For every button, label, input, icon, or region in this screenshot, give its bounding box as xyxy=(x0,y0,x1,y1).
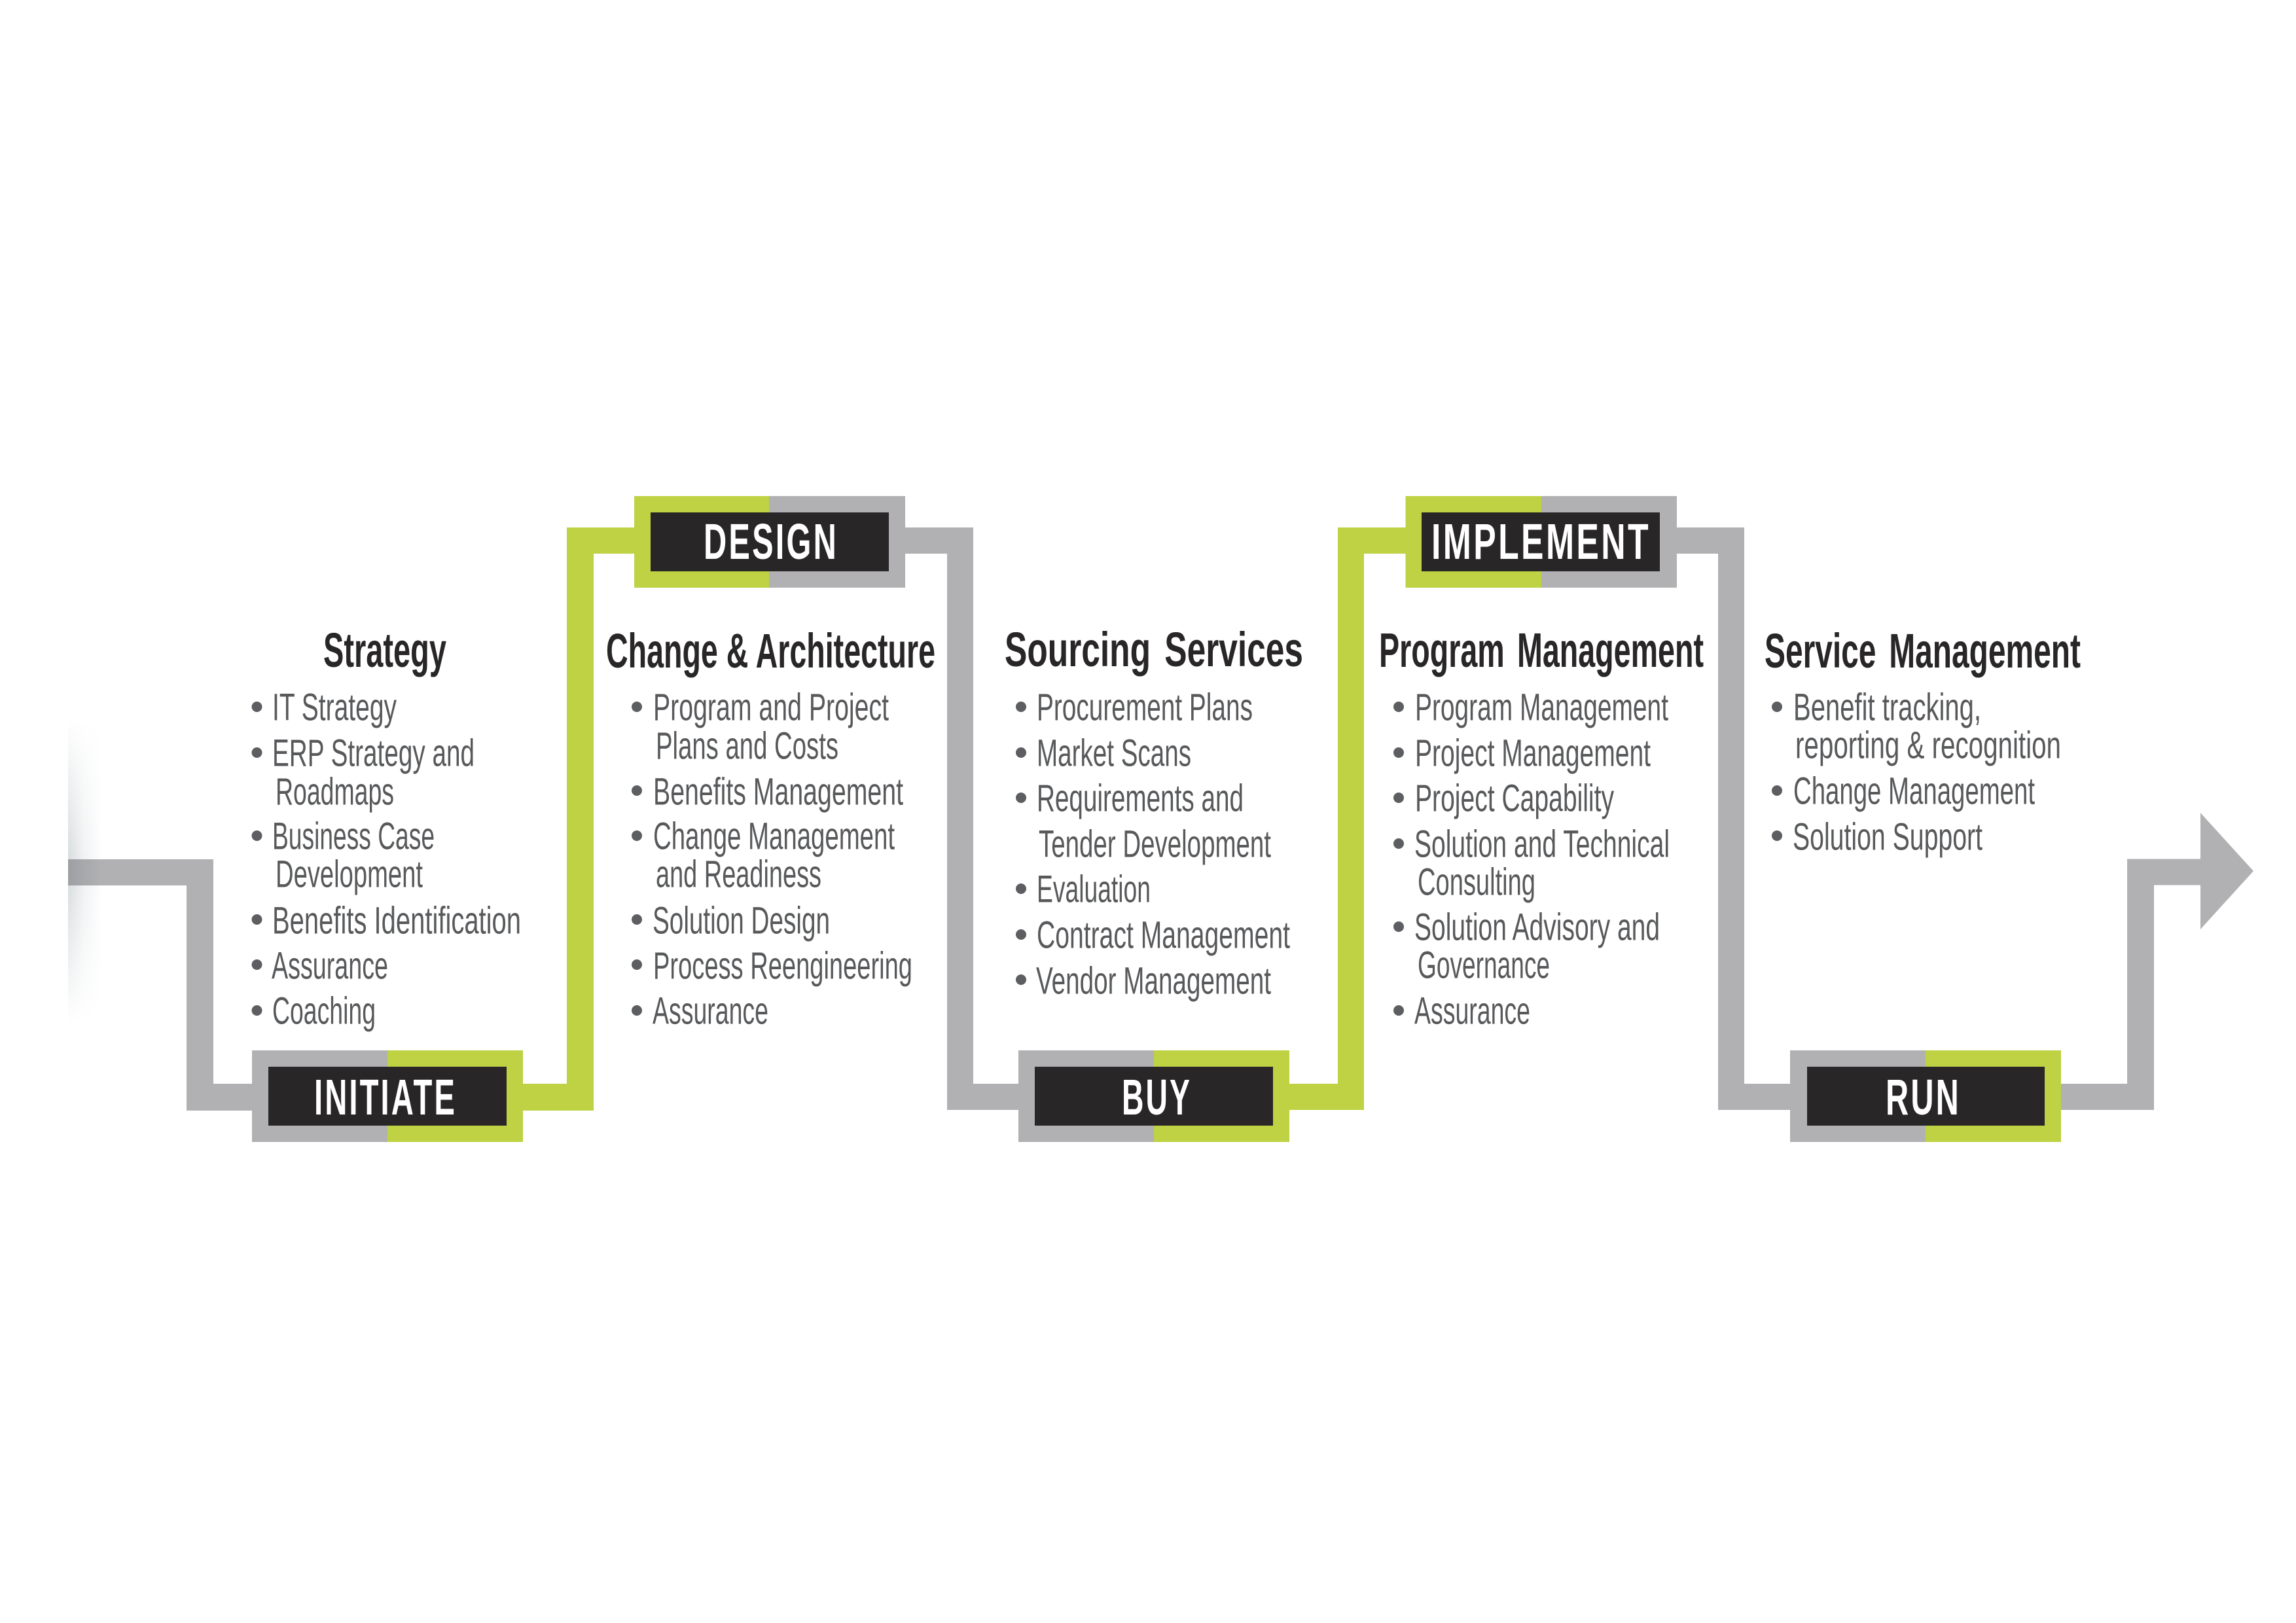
list item: Solution Advisory and Governance: Governance xyxy=(1418,944,1550,987)
list item: Vendor Management xyxy=(1016,959,1271,1003)
badge: INITIATE xyxy=(252,1050,523,1142)
badge: IMPLEMENT: IMPLEMENT xyxy=(1431,514,1651,570)
list item: Program Management: Program Management xyxy=(1415,686,1668,729)
list item: Project Capability: Project Capability xyxy=(1415,777,1614,819)
list item: Solution Advisory and Governance xyxy=(1393,906,1660,987)
list item: Requirements and Tender Development xyxy=(1016,777,1271,865)
list item: Solution Support xyxy=(1772,815,1982,859)
list item: Benefit tracking, reporting & recognition: Benefit tracking, xyxy=(1793,686,1981,729)
badge: DESIGN xyxy=(634,496,905,588)
connector: Buy to Implement xyxy=(1289,527,1406,1110)
list item: Market Scans: Market Scans xyxy=(1037,732,1191,775)
list item: Assurance xyxy=(1393,990,1530,1033)
list item: Benefit tracking, reporting & recognition: reporting & recognition xyxy=(1795,724,2061,767)
list item: Benefits Identification: Benefits Identification xyxy=(272,899,521,942)
list item: Change Management and Readiness xyxy=(632,815,895,895)
list item: Solution and Technical Consulting: Consulting xyxy=(1418,861,1535,903)
list item: Vendor Management: Vendor Management xyxy=(1036,959,1271,1003)
list item: Business Case Development: Business Case xyxy=(272,815,435,857)
list item: IT Strategy xyxy=(251,686,397,729)
list item: Assurance: Assurance xyxy=(653,990,768,1033)
list item: Solution Advisory and Governance: Solution Advisory and xyxy=(1414,906,1660,949)
badge: RUN xyxy=(1790,1050,2061,1142)
list item: ERP Strategy and Roadmaps: Roadmaps xyxy=(276,771,394,813)
connector: entry line into Initiate xyxy=(68,859,252,1111)
list item: ERP Strategy and Roadmaps xyxy=(251,732,475,813)
list item: Requirements and Tender Development: Tender Development xyxy=(1039,823,1271,865)
list item: Benefit tracking, reporting & recognition xyxy=(1772,686,2061,767)
list item: Contract Management xyxy=(1016,914,1290,957)
badge: BUY: BUY xyxy=(1122,1069,1192,1126)
list item: Program and Project Plans and Costs xyxy=(632,686,889,767)
connector: Initiate to Design xyxy=(523,527,634,1111)
list item: Market Scans xyxy=(1016,732,1191,775)
arrow: exit from Run xyxy=(2061,813,2253,1110)
list item: Solution and Technical Consulting xyxy=(1393,823,1670,903)
list item: Evaluation: Evaluation xyxy=(1037,868,1151,911)
badge: INITIATE: INITIATE xyxy=(314,1069,457,1126)
list item: Change Management and Readiness: and Readiness xyxy=(656,853,821,895)
badge: RUN: RUN xyxy=(1886,1069,1961,1126)
list item: Change Management xyxy=(1772,770,2035,813)
connector: Design to Buy xyxy=(905,527,1018,1110)
heading: Strategy: Strategy xyxy=(323,623,446,677)
list item: IT Strategy: IT Strategy xyxy=(272,686,397,729)
panel: Change & Architecture xyxy=(606,624,935,1033)
list item: Project Management: Project Management xyxy=(1415,732,1651,775)
heading: Change & Architecture: Change & Architecture xyxy=(606,624,935,678)
badge: DESIGN: DESIGN xyxy=(704,514,838,570)
list item: Evaluation xyxy=(1016,868,1151,911)
list item: Assurance: Assurance xyxy=(1414,990,1530,1033)
list item: Process Reengineering xyxy=(632,945,912,987)
list item: Procurement Plans: Procurement Plans xyxy=(1037,686,1253,729)
list item: Coaching: Coaching xyxy=(272,990,376,1033)
list item: Program and Project Plans and Costs: Program and Project xyxy=(653,686,889,729)
heading: Program Management: Program Management xyxy=(1379,623,1704,677)
heading: Service Management: Service Management xyxy=(1765,624,2081,678)
list item: Change Management: Change Management xyxy=(1793,770,2035,813)
badge: BUY xyxy=(1018,1050,1289,1142)
panel: Sourcing Services xyxy=(1005,622,1303,1003)
panel: Program Management xyxy=(1379,623,1704,1033)
list item: Program Management xyxy=(1393,686,1668,729)
list item: Assurance: Assurance xyxy=(272,945,388,987)
list item: Requirements and Tender Development: Requirements and xyxy=(1037,777,1244,819)
list item: Benefits Identification xyxy=(251,899,521,942)
list item: Change Management and Readiness: Change Management xyxy=(653,815,895,857)
list item: Contract Management: Contract Management xyxy=(1037,914,1290,957)
list item: Project Management xyxy=(1393,732,1651,775)
left edge shadow xyxy=(68,750,92,992)
list item: Solution Design: Solution Design xyxy=(653,899,830,942)
list item: Solution Design xyxy=(632,899,830,942)
list item: ERP Strategy and Roadmaps: ERP Strategy and xyxy=(272,732,475,775)
list item: Benefits Management xyxy=(632,771,903,813)
panel: Service Management xyxy=(1765,624,2081,859)
list item: Business Case Development: Development xyxy=(276,853,423,895)
list item: Assurance xyxy=(632,990,768,1033)
list item: Process Reengineering: Process Reengineering xyxy=(653,945,912,987)
list item: Project Capability xyxy=(1393,777,1614,819)
heading: Sourcing Services: Sourcing Services xyxy=(1005,622,1303,677)
list item: Solution Support: Solution Support xyxy=(1793,815,1982,859)
list item: Program and Project Plans and Costs: Plans and Costs xyxy=(656,725,838,767)
badge: IMPLEMENT xyxy=(1406,496,1677,588)
list item: Solution and Technical Consulting: Solution and Technical xyxy=(1414,823,1670,865)
list item: Business Case Development xyxy=(251,815,435,895)
list item: Benefits Management: Benefits Management xyxy=(653,771,903,813)
list item: Coaching xyxy=(251,990,376,1033)
panel: Strategy xyxy=(251,623,521,1033)
list item: Procurement Plans xyxy=(1016,686,1253,729)
connector: Implement to Run xyxy=(1677,527,1790,1110)
list item: Assurance xyxy=(251,945,388,987)
